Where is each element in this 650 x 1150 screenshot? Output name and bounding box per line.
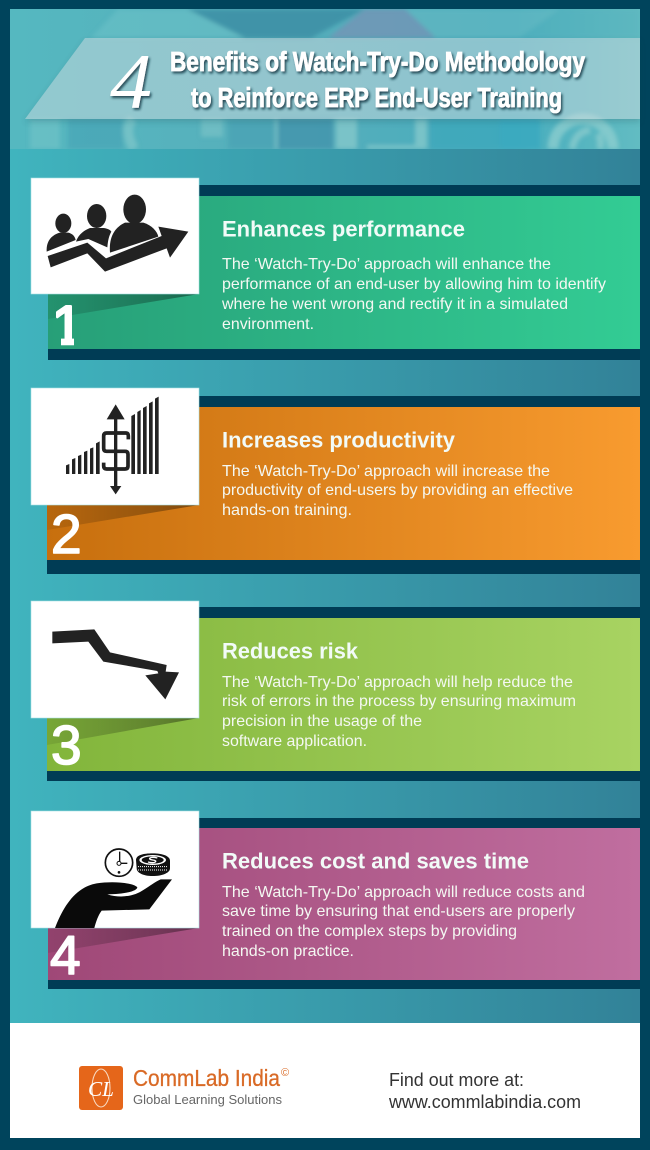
body text: The ‘Watch-Try-Do’ approach will increase the [222,463,550,480]
header background image [10,9,640,149]
title: 4 [110,38,152,125]
header banner [10,9,640,149]
white icon card [31,388,199,505]
icon: falling arrow [52,629,179,699]
panel shadow strips [48,818,640,989]
body text: precision in the usage of the [222,713,422,730]
main background [10,149,640,1024]
fold shadow [47,718,199,745]
title ribbon [25,38,640,119]
body text [222,884,585,960]
body text [221,256,606,333]
body text: where he went wrong and rectify it in a simulated [221,296,568,313]
body text: hands-on training. [222,502,352,519]
white icon card [31,811,199,928]
icon: hand holding clock and coins [55,849,172,928]
panel shadow strips [47,396,640,574]
panel body [48,196,640,349]
heading: Enhances performance [222,216,465,242]
logo mark: CL [88,1077,114,1101]
body text: performance of an end-user by allowing him to identify [222,276,606,293]
fold shadow [47,505,199,530]
panel shadow strips [47,607,640,781]
heading: Reduces cost and saves time [222,848,529,874]
panel shadow strips [48,185,640,360]
panel body [47,618,640,771]
number 1: 1 [52,294,83,356]
panel: enhances performance [31,178,640,360]
body text [222,674,576,750]
panel: reduces risk [31,601,640,781]
body text: risk of errors in the process by ensuring maximum [222,693,576,710]
panel body [47,407,640,560]
body text: hands-on practice. [222,943,354,960]
white icon card [31,601,199,718]
contact text: Find out more at: [389,1070,524,1090]
contact text [388,1070,581,1112]
title [110,38,585,125]
logo tagline: Global Learning Solutions [133,1092,282,1107]
number 3: 3 [51,714,82,776]
footer background [10,1023,640,1138]
panel body [48,828,640,980]
number 2: 2 [51,503,82,565]
body text: environment. [222,316,314,333]
icon: people with rising arrow [47,195,188,272]
fold shadow [48,294,199,319]
white icon card [31,178,199,294]
body text: trained on the complex steps by providing [222,923,517,940]
contact text: www.commlabindia.com [388,1092,581,1112]
logo [79,1065,289,1110]
heading: Reduces risk [222,638,359,664]
heading: Increases productivity [222,428,456,452]
footer panel [10,1023,640,1138]
fold shadow [48,928,199,953]
panel: reduces cost and saves time [31,811,640,989]
number 4: 4 [50,924,81,986]
logo name: CommLab India [133,1065,280,1091]
body text: software application. [222,733,367,750]
body text: productivity of end-users by providing an effective [222,482,573,499]
panel: increases productivity [31,388,640,574]
copyright mark: © [281,1067,289,1079]
body text: The ‘Watch-Try-Do’ approach will help reduce the [222,674,573,691]
body text: The ‘Watch-Try-Do’ approach will enhance the [222,256,551,273]
icon: dollar with bars and arrows [66,397,159,494]
body text: save time by ensuring that end-users are properly [222,903,575,920]
logo mark [79,1066,123,1110]
body text [222,463,573,519]
body text: The ‘Watch-Try-Do’ approach will reduce costs and [222,884,585,901]
